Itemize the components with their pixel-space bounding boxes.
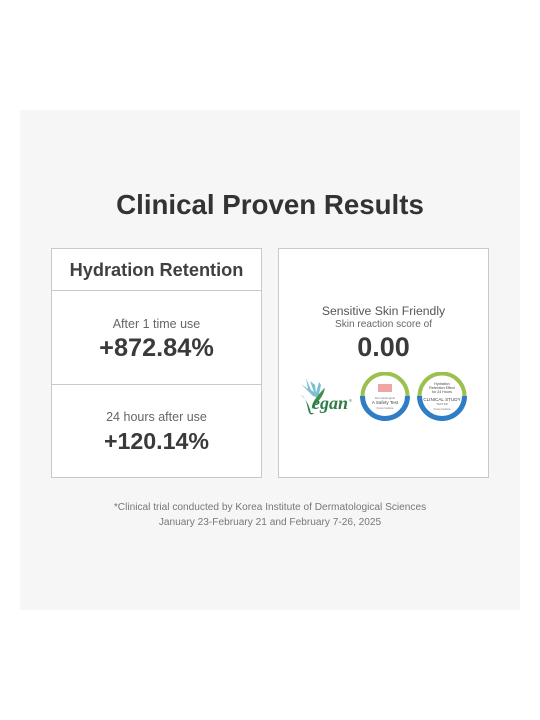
icon: clinical study badge: CLINICAL STUDY xyxy=(423,397,461,402)
icon: clinical study badge: Retention Effect xyxy=(429,386,455,390)
divider under heading xyxy=(52,290,261,291)
divider between stats xyxy=(52,384,261,385)
icon: safety badge xyxy=(360,372,410,421)
icon: clinical study badge: Hydration xyxy=(434,382,450,386)
label: skin reaction score: Skin reaction score of xyxy=(335,319,432,330)
title: Clinical Proven Results xyxy=(116,189,424,220)
heading: hydration retention: Hydration Retention xyxy=(70,260,243,280)
stat: 0.00: 0.00 xyxy=(357,332,410,362)
stat: +120.14%: +120.14% xyxy=(104,428,209,454)
icon: clinical study badge xyxy=(417,372,467,421)
panel: sensitive skin friendly xyxy=(278,248,489,478)
icon: vegan logo: ® xyxy=(349,398,352,403)
footnote xyxy=(114,502,426,528)
label: after 1 time use: After 1 time use xyxy=(113,317,200,331)
icon: vegan logo: egan xyxy=(312,393,348,413)
panel: hydration retention xyxy=(51,248,262,478)
footnote: *Clinical trial conducted by Korea Institute of Dermatological Sciences xyxy=(114,502,426,513)
footnote: January 23-February 21 and February 7-26, 2025 xyxy=(159,517,381,528)
icon: safety badge: Korea Institute xyxy=(377,406,394,410)
heading: sensitive skin friendly: Sensitive Skin Friendly xyxy=(322,304,445,318)
icon: safety badge: Dermatological xyxy=(375,396,395,400)
icon: clinical study badge: for 24 Hours xyxy=(432,390,452,394)
label: 24 hours after use: 24 hours after use xyxy=(106,410,207,424)
stat: +872.84%: +872.84% xyxy=(99,334,214,362)
icon: safety badge: A Safety Test xyxy=(372,400,399,405)
icon: vegan logo xyxy=(301,378,352,414)
icon: clinical study badge: TESTED xyxy=(436,402,449,406)
background panel xyxy=(20,110,520,610)
icon: clinical study badge: Korea Institute xyxy=(434,407,451,411)
